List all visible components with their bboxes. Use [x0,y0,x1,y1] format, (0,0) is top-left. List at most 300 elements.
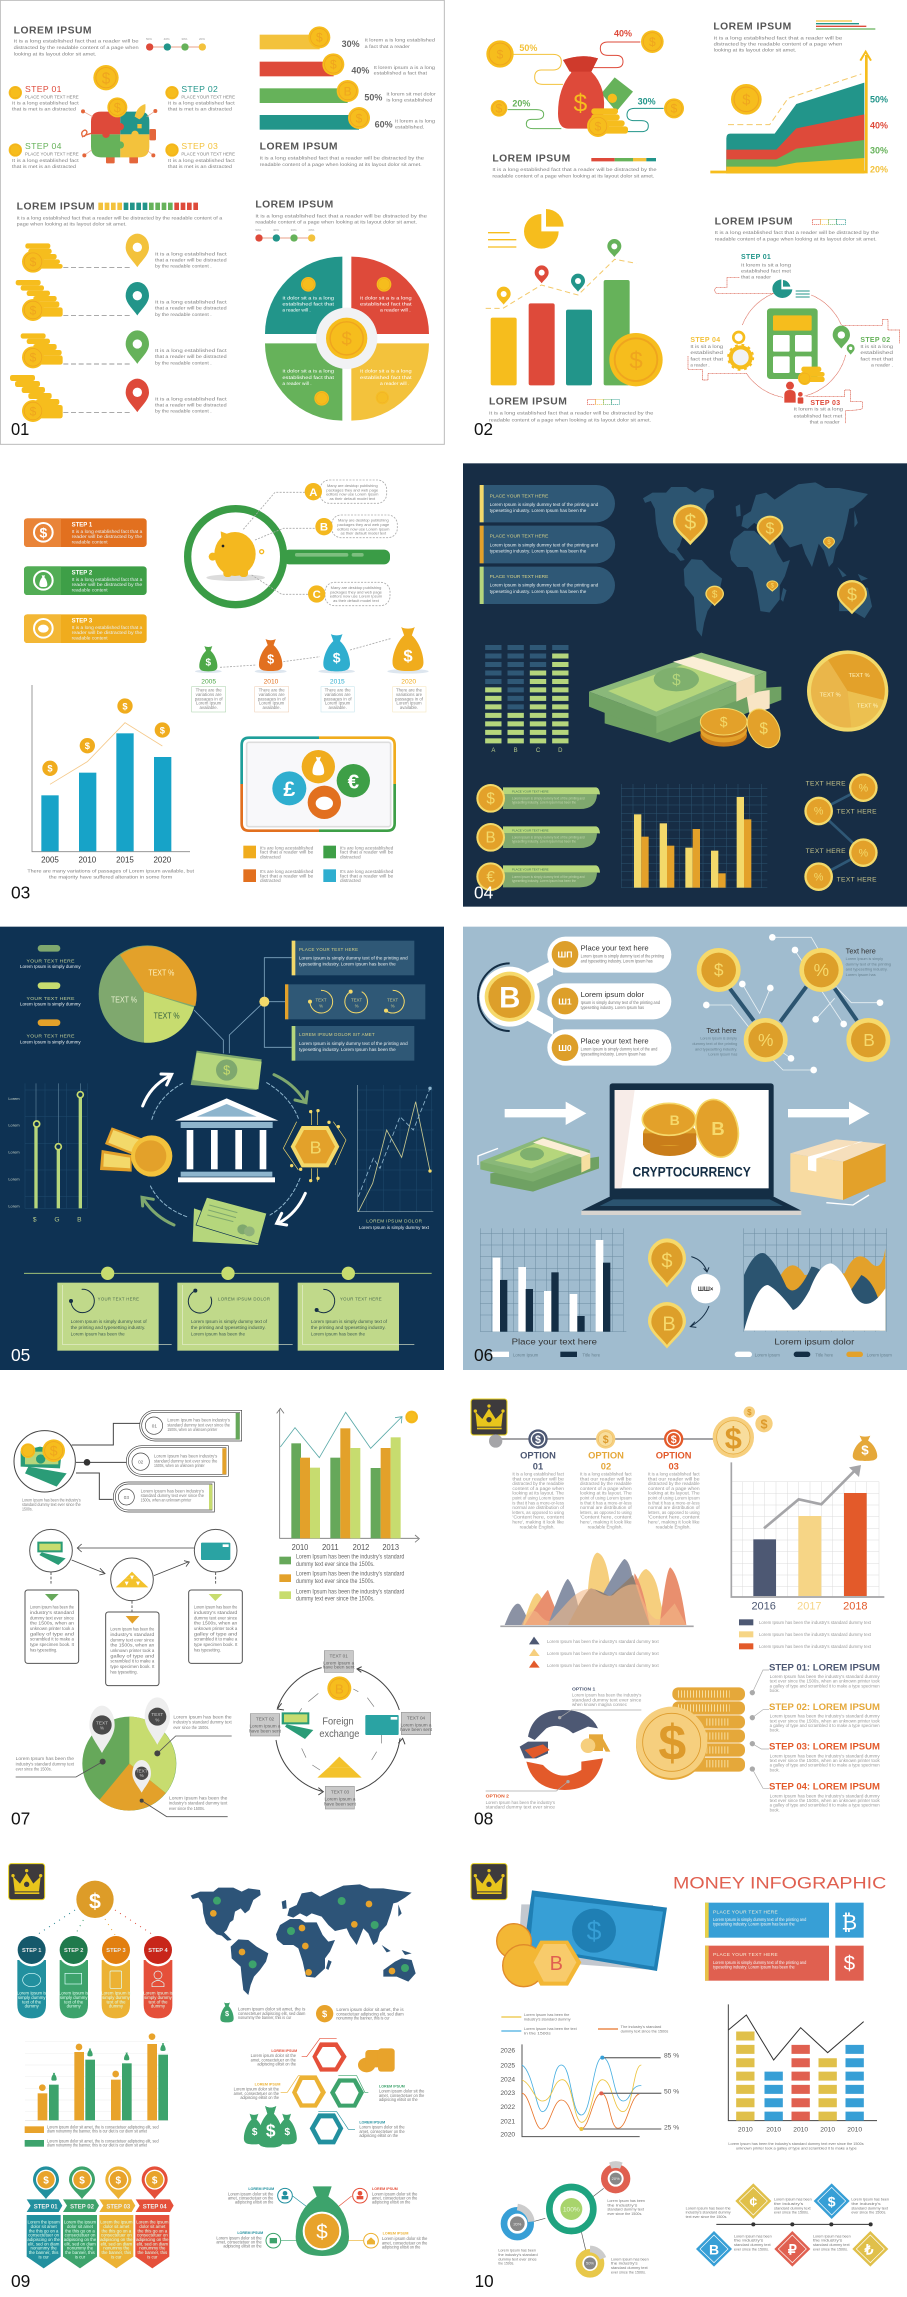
calculator cycle: STEP 04 [690,337,721,344]
line chart right: LOREM IPSUM DOLOR [366,1219,423,1224]
big money bag with icons [216,2186,428,2256]
money gold card flow: has typesetting. [30,1647,57,1652]
layered mountain chart: Lorem Ipsum has been the industry's standard dummy text [547,1651,659,1656]
pin arrows step cards: adipiscing on the [27,2237,61,2242]
coin network: % [814,960,829,980]
wave line chart: 25 % [664,2124,679,2131]
quadrant circle chart: established fact that [282,302,335,308]
coin network: Lorem Ipsum has [708,1053,738,1057]
money bags timeline: 2010 [264,679,279,686]
ring network: Lorem Ipsum has been [611,2256,649,2261]
option timeline: here', making it look like [580,1520,632,1525]
heading bottom: readable content of a page when looking at its layout dolor sit amet. [489,418,651,424]
grid bar chart [621,784,767,888]
foreign exchange cycle: TEXT 01 [330,1654,348,1659]
money bags timeline: passages in of [195,696,223,701]
horizontal percent bars: is long established [386,98,433,104]
calculator cycle: LOREM IPSUM [715,216,793,227]
magnifier with piggy: editors now use Lorem Ipsum [337,526,390,531]
horizontal percent bars: It lorem ipsum a is a long [374,65,435,71]
icon: piggy bank puzzle: $ [114,101,121,115]
timeline with three cards: the printing and typesetting industry. [311,1325,386,1331]
connector lines [194,958,292,1053]
pin arrows step cards: nonummy the [67,2246,94,2251]
ring network: the industry's standard [498,2252,538,2257]
arrows [505,1102,870,1125]
option timeline: 03 [668,1461,679,1471]
coin stack and steps: book. [770,1728,780,1733]
icon: cardboard box [790,1139,886,1205]
three green tags: B [486,830,496,847]
step tree: text of the [148,1999,168,2004]
horizontal percent bars: $ [330,58,337,72]
big money bag with icons: LOREM IPSUM [372,2187,398,2191]
option timeline: here', making it look like [512,1520,565,1525]
grid bar chart 2016-2018: 2018 [843,1601,868,1613]
grid bar chart 2016-2018 [731,1436,884,1649]
panel 08: options, charts, coins [471,1399,884,1828]
icon: money stack and coins: $ [720,714,728,730]
big money bag with icons: Lorem ipsum dolor sit the [382,2236,428,2241]
money bags timeline: available. [200,705,218,710]
layered mountain chart: Lorem Ipsum has been the industry's standard dummy text [547,1663,659,1668]
money gold card flow: Lorem Ipsum has been the [110,1627,155,1632]
heading right lower: LOREM IPSUM [255,200,334,211]
two info bars: Lorem Ipsum is simply dummy text of the printing and [713,1917,807,1922]
money gold card flow: galley of type and [110,1653,155,1658]
currency diamonds timeline: ever since the 1500s. [734,2246,769,2251]
percent coin network: TEXT HERE [837,877,877,884]
heading right lower: 50% [255,228,262,232]
money circle with option tags: 1500s. [22,1507,33,1513]
bar chart 2005-2020: $ [122,701,128,711]
heading top right: It is a long established fact that a reader will be [714,35,843,41]
paired bar chart: diam nonummy the banner, this is cur diet is cur diem sit amet [47,2142,148,2147]
step 04 [9,141,79,170]
grouped bar chart 2010-2013: 2012 [353,1542,370,1552]
calculator cycle: established [860,350,893,356]
coin network: and typesetting industry. [695,1047,737,1051]
money circle with option tags: 02 [138,1460,144,1465]
step 3 tag [24,614,147,643]
step tree: STEP 1 [22,1948,41,1954]
money bags timeline: Lorem Ipsum [396,701,422,706]
money bag with percent callouts: $ [497,47,504,61]
pie with pins: % [155,1718,159,1723]
pin arrows step cards: the this go on a [29,2228,59,2233]
option timeline: content of a page when [648,1486,700,1491]
pin arrows step cards [27,2166,174,2268]
option timeline: $ [603,1434,609,1446]
panel 02: money bag, area chart, bars, calculator [474,21,900,439]
pie with pins: industry's standard dummy text [173,1720,232,1726]
paired bar chart [25,2033,168,2147]
wave line chart: 2021 [500,2119,515,2126]
coin network: Text here [706,1026,736,1035]
quadrant circle chart: It dolor sit a is a long [282,295,334,301]
bitcoin option pills: Ipsum is simply dummy text of the printing and [581,1000,661,1005]
money circle with option tags: standard dummy text ever since the [167,1422,230,1428]
cycle arrows [142,1074,307,1225]
level bars A-D: A [491,748,495,754]
quadrant circle chart: a reader will . [380,381,409,387]
right info boxes: typesetting industry. Lorem Ipsum has been the [299,1047,396,1053]
pin arrows step cards: $ [152,2175,158,2186]
legend pills: Lorem Ipsum is simply dummy [20,1040,81,1046]
magnifier with piggy: Many are desktop publishing [327,483,378,488]
money circle with option tags: standard dummy text ever since the [141,1493,204,1499]
step 03: It is a long established fact [168,158,235,164]
option timeline: $ [535,1434,541,1446]
step tree [16,1881,174,2018]
money gold card flow: dummy text ever since [110,1637,155,1642]
currency diamonds timeline: Lorem Ipsum has been [813,2233,851,2238]
money gold card flow: Lorem Ipsum has been the [194,1605,238,1610]
right info boxes: % [355,1003,359,1008]
step 04: that is met is an distracted [12,164,76,170]
option timeline: It is a long established fact [580,1471,632,1476]
option timeline: distracted by the readable [648,1481,700,1486]
hexagons and money bags: $ [285,2127,291,2138]
handshake cycle: OPTION 2 [486,1794,509,1800]
three green tags: PLACE YOUR TEXT HERE [512,868,549,872]
option timeline: OPTION [520,1450,556,1460]
grid bar chart 2016-2018: Lorem Ipsum has been the industry's standard dummy text [759,1620,872,1625]
layered mountain chart [500,1553,694,1668]
option timeline: 01 [533,1461,543,1471]
money bags timeline: $ [403,646,413,665]
pin arrows step cards: adipiscing on the [64,2237,97,2242]
grouped bar chart 2010-2013: Lorem Ipsum has been the industry's standard [296,1589,404,1595]
foreign exchange cycle: Lorem Ipsum a [323,1660,355,1665]
bar chart 2005-2020: $ [160,725,166,735]
bar chart: Lorem Ipsum [513,1353,539,1358]
stacked block chart: 2010 [847,2127,862,2134]
money bag with percent callouts: 40% [614,29,632,39]
step 01: It is a long established fact [12,101,79,107]
money circle with option tags: $ [50,1443,58,1459]
icon: banknote: $ [223,1064,230,1078]
bar chart [480,1228,626,1358]
pin arrows step cards: the this go on a [65,2228,95,2233]
step 3 tag: It is a long established fact that a [72,625,143,631]
money circle with option tags: standard dummy text ever since the [22,1502,81,1508]
coin stacks with map pins: It is a long established fact [155,300,227,306]
frame legend: distracted [340,878,361,883]
step 2 tag: readable content [72,587,108,593]
coin stacks with map pins: that a reader will be distracted [155,354,227,360]
step 04: STEP 04 [25,141,62,151]
currency frame [242,738,395,831]
step 03: PLACE YOUR TEXT HERE [181,152,236,158]
world map with pins: $ [766,520,775,537]
money bags timeline: There are the [325,687,351,692]
option timeline: is that it has a more-or-less [580,1500,632,1505]
hexagons and money bags: adipiscing elitsit on the [240,2095,280,2100]
ring network: the industry's [607,2202,637,2207]
icon: banknote [191,1051,262,1090]
option timeline: letters, as opposed to using [580,1510,632,1515]
money bag with percent callouts: $ [573,91,587,118]
step 2 tag: reader will be distracted by the [72,582,143,588]
two info bars: ₿ [841,1910,857,1934]
ring network: 20% [513,2221,522,2226]
number 03: 03 [11,882,30,902]
coin network [692,934,891,1073]
coin stack and steps: Lorem Ipsum has been the industry's standard dummy [770,1714,881,1719]
horizontal percent bars: established a fact that [374,71,428,77]
panel 04: dark blue with map [463,463,907,907]
money gold card flow: the 1500s, when an [30,1621,75,1626]
magnifier with piggy: A [309,487,317,499]
option timeline: content of a page when [512,1486,565,1491]
pin arrows step cards: STEP 01 [34,2204,58,2210]
hexagons and money bags: amet, consectetuer on the [234,2091,280,2096]
bitcoin option pills: Ш1 [558,996,572,1006]
heading right lower: 20% [308,228,315,232]
world map with markers [191,1884,416,2022]
coin network: Lorem Ipsum is simply [700,1037,737,1041]
quadrant circle chart: established fact that [282,375,335,381]
money circle with option tags: Lorem Ipsum has been industry's [154,1454,218,1460]
intro text block: distracted by the readable content of a page when [14,45,139,51]
big money bag with icons: adipiscing elitsit on the [223,2244,262,2249]
paired bar chart: diam nonummy the banner, this is cur diet is cur diem sit amet [47,2129,148,2134]
calculator cycle: established [690,350,723,356]
timeline with three cards: the printing and typesetting industry. [71,1325,145,1331]
pin arrows step cards: dolor sit amet [31,2224,57,2229]
horizontal percent bars: $ [316,31,323,45]
icon: money stack and coins: $ [759,720,768,737]
currency diamonds timeline: ever since the 1500s. [851,2210,886,2215]
pin arrows step cards: consectetuer on [101,2233,132,2238]
right info boxes: TEXT [387,998,399,1003]
left slider chart: Lorem [8,1096,20,1101]
pin arrows step cards: consectetuer on [28,2233,60,2238]
bitcoin option pills: and typesetting industry. Lorem Ipsum has [581,959,653,964]
heading with colour squares: It is a long established fact that a reader will be distracted by the readable content of a [17,215,223,221]
money circle with option tags [14,1410,242,1513]
coin stacks with map pins: $ [30,351,37,365]
coin stacks with map pins: It is a long established fact [155,251,227,257]
pin arrows step cards: Lorem the ipsum [136,2220,169,2225]
frame legend: fact that a reader will be [340,850,394,855]
pin arrows step cards: is cur [75,2254,86,2259]
quadrant circle chart: a reader will . [380,308,411,314]
step tree: simply dummy [18,1995,46,2000]
pin arrows step cards: the banner, this [29,2250,58,2255]
level bars A-D: B [514,748,518,754]
left slider chart [8,1083,87,1223]
panel 05: navy banking cycle [0,927,444,1370]
exchange pins: B [662,1314,676,1336]
calculator cycle: It is sit a long [690,344,723,350]
big money bag with icons: adipiscing elitsit on the [235,2200,274,2205]
hexagons and money bags: LOREM IPSUM [255,2083,280,2087]
timeline with three cards: LOREM IPSUM DOLOR [218,1297,271,1302]
quadrant circle chart: a reader will . [282,381,312,387]
three label pills: Lorem Ipsum is simply dummy text of the printing and [490,502,599,508]
currency diamonds timeline: Lorem Ipsum has been the [686,2205,731,2210]
right info boxes: Lorem Ipsum is simply dummy text of the printing and [299,1041,408,1047]
right info boxes: Lorem Ipsum is simply dummy text of the printing and [299,956,408,962]
money gold card flow: unknown printer took a [110,1648,155,1653]
step tree: dummy [67,2004,82,2009]
big money bag with icons: amet, consectetuer on the [216,2240,262,2245]
world map with pins: $ [847,585,857,605]
exchange pins [648,1238,720,1349]
step 3 tag: reader will be distracted by the [72,630,143,636]
right info boxes: PLACE YOUR TEXT HERE [299,947,359,953]
ring network: the industry's [611,2261,638,2266]
step tree: Lorem Ipsum is [17,1990,46,1995]
percent coin network: TEXT HERE [837,809,877,816]
number 01: 01 [11,419,29,439]
money bags timeline: 2015 [330,679,345,686]
currency diamonds timeline: standard dummy text [813,2242,851,2247]
right info boxes: TEXT [315,998,327,1003]
money bags timeline: passages in of [258,696,286,701]
pin arrows step cards: $ [116,2175,122,2186]
step 3 tag: readable content [72,635,108,641]
hexagons and money bags: adipiscing elitsit on the [257,2061,297,2066]
hexagons and money bags: amet, consectetuer on the [251,2057,297,2062]
exchange pins: $ [661,1250,673,1272]
level bars A-D: C [536,748,541,754]
bitcoin option pills: Lorem ipsum dolor [581,990,644,999]
option timeline: that our reader will be [512,1476,565,1481]
money bag with percent callouts: $ [595,119,602,133]
two info bars: typesetting industry. Lorem Ipsum has been the [713,1921,795,1926]
area chart: Lorem ipsum dolor [774,1337,854,1347]
paired bar chart: Lorem ipsum dolor sit amet, the is consectetuer adipiscing elit, sed [47,2138,159,2143]
money gold card flow: industry's standard [110,1632,155,1637]
money gold card flow: dummy text ever since [194,1615,238,1620]
big money bag with icons: $ [316,2220,328,2243]
grouped bar chart 2010-2013: dummy text ever since the 1500s. [296,1597,375,1603]
area chart: Lorem Ipsum [867,1353,892,1358]
ring network [498,2165,649,2274]
step 02: PLACE YOUR TEXT HERE [181,94,236,100]
world map with markers: $ [225,2009,229,2018]
bar chart 2005-2020: 2020 [153,856,172,865]
money gold card flow: type specimen book. It [30,1642,75,1647]
grouped bar chart 2010-2013: dummy text ever since the 1500s. [296,1562,375,1568]
bar chart 2005-2020: $ [47,764,53,774]
currency diamonds timeline: Lorem Ipsum has been [774,2197,812,2202]
quadrant circle chart: $ [341,328,352,349]
line chart right [357,1085,433,1231]
pie with pins: TEXT [151,1712,163,1717]
step tree: STEP 2 [64,1948,83,1954]
pin arrows step cards: adipiscing on the [136,2237,169,2242]
option timeline: letters, as opposed to using [648,1510,700,1515]
title: money infographic: MONEY INFOGRAPHIC [673,1873,886,1892]
option timeline: distracted by the readable [580,1481,632,1486]
handshake cycle: when known magna consec [572,1702,628,1707]
money bags timeline: variations are [396,692,423,697]
three label pills: typesetting industry. Lorem Ipsum has been the [490,589,587,595]
step 3 tag: STEP 3 [72,618,93,624]
currency frame: € [348,770,360,793]
option timeline: that our reader will be [648,1476,700,1481]
pin arrows step cards: the this go on a [138,2228,168,2233]
pie with pins: % [140,1773,144,1778]
heading right lower: 30% [291,228,297,232]
heading and text below bars: It is a long established fact that a reader will be distracted by the [260,156,424,162]
timeline with three cards: the printing and typesetting industry. [191,1325,266,1331]
currency diamonds timeline: ₽ [788,2241,797,2257]
magnifier with piggy: Many are desktop publishing [338,518,389,523]
option timeline: point of using Lorem Ipsum [648,1495,700,1500]
three green tags: typesetting industry. Lorem Ipsum has been the [512,879,576,883]
stacked block chart: unknown printer took a galley of type and scrambled it to make a type [736,2145,857,2150]
money gold card flow: the 1500s, when an [110,1643,155,1648]
world map with pins: $ [771,583,775,589]
currency diamonds timeline: Lorem Ipsum has been [851,2197,889,2202]
money bags timeline: available. [400,705,418,710]
big money bag with icons: amet, consectetuer on the [228,2196,274,2201]
percent coin network: TEXT HERE [806,848,846,855]
step tree: text of the [22,1999,42,2004]
number 05: 05 [11,1345,30,1365]
timeline with three cards: Lorem Ipsum has been the [71,1331,125,1337]
number 02: 02 [474,419,493,439]
coin stack and steps: a galley of type and scrambled it to make a type specimen [770,1723,880,1728]
pin arrows step cards: the banner, this [138,2250,167,2255]
percent coin network: % [859,847,869,859]
coin stack and steps [636,1663,881,1812]
pie with pins: ever since the 1500s. [169,1806,205,1812]
money gold card flow: industry's standard [30,1610,75,1615]
gold pie: TEXT % [820,693,841,699]
pin arrows step cards: dolor sit amet [67,2224,94,2229]
panel 10: money infographic [471,1864,889,2291]
three label pills: Lorem Ipsum is simply dummy text of the printing and [490,542,599,548]
three green tags [476,784,600,891]
pin arrows step cards: elit, sed on diam [28,2241,60,2246]
big money bag with icons: Lorem ipsum dolor sit the [372,2191,418,2196]
pin arrows step cards: STEP 04 [143,2204,167,2210]
pin arrows step cards: nonummy the [139,2246,166,2251]
pie with pins: % [100,1726,104,1731]
percent coin network: TEXT HERE [806,780,846,787]
horizontal percent bars: a fact that a reader [365,44,410,50]
option timeline [489,1406,773,1529]
money bags timeline: available. [329,705,347,710]
wave line chart: 2022 [500,2104,515,2111]
coin network: Lorem Ipsum is simply [846,957,883,961]
foreign exchange cycle: TEXT 03 [331,1789,350,1794]
option timeline: 'Content here, content [512,1515,565,1520]
currency diamonds timeline: text ever since the 1500s. [686,2214,727,2219]
heading with colour squares [17,202,223,228]
heading with colour squares: page when looking at its layout dolor sit amet. [17,222,127,228]
step 1 tag: $ [39,524,47,540]
stacked area chart: 50% [870,95,888,105]
hexagons and money bags: LOREM IPSUM [271,2049,297,2053]
two info bars: typesetting industry. Lorem Ipsum has been the [713,1964,795,1969]
coin stack and steps: $ [658,1715,686,1771]
right info boxes: % [391,1003,395,1008]
step 04: PLACE YOUR TEXT HERE [25,152,79,158]
magnifier with piggy: packages they and web page [330,589,383,594]
step tree: Lorem Ipsum is [101,1990,131,1995]
step 03: that is met is an distracted [168,164,232,170]
left slider chart: G [54,1216,60,1223]
foreign exchange cycle [249,1651,433,1809]
currency diamonds timeline: ever since the 1500s. [813,2246,848,2251]
